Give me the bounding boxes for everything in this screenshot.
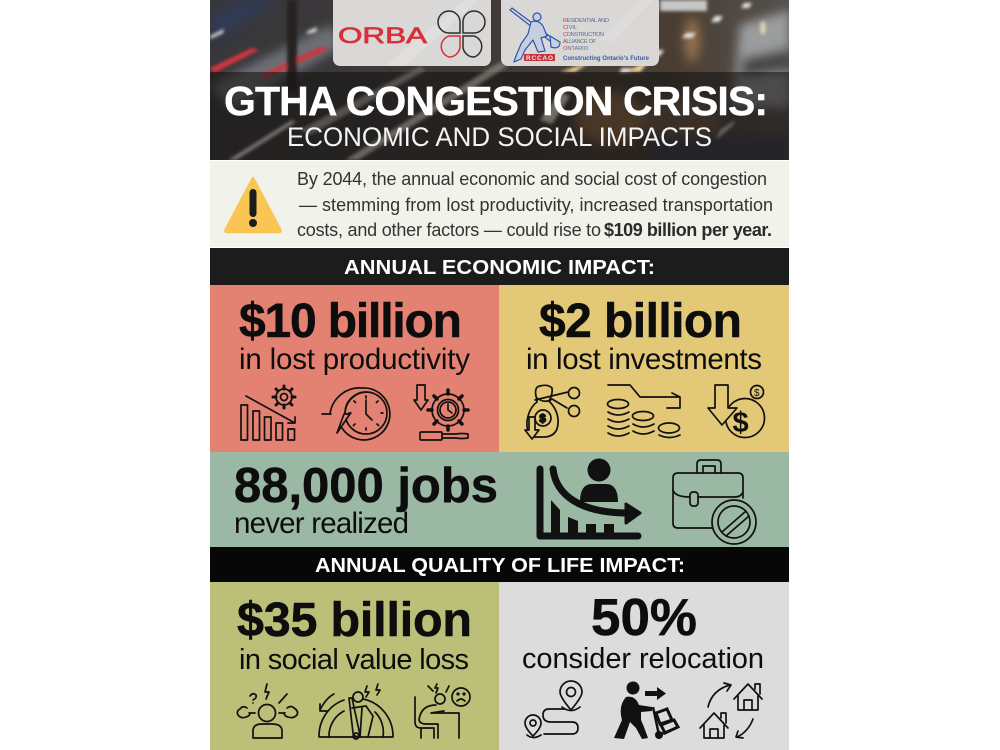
icon: stressed person <box>237 684 298 738</box>
section band: annual quality of life impact <box>210 547 789 582</box>
icon: strained person at gauge <box>319 684 393 739</box>
icon: falling dollar coin: $ <box>754 388 760 399</box>
icon: money bag with scissors: $ <box>540 413 546 425</box>
icon: gear clock with down arrow and screwdriver <box>414 385 468 440</box>
section band: annual economic impact: ANNUAL ECONOMIC IMPACT: <box>344 257 655 279</box>
header photo of blurred highway traffic <box>210 0 790 165</box>
icon: frustrated person at desk <box>415 684 470 738</box>
icon: houses with cycle arrows <box>700 683 762 738</box>
icon: shrinking coin stacks <box>608 385 680 438</box>
infographic canvas <box>210 0 789 750</box>
stat: 88,000 jobs: 88,000 jobs <box>234 459 498 513</box>
RCCAO name: ONTARIO <box>563 46 589 52</box>
stat: 50%: 50% <box>591 589 697 647</box>
icon: money bag with scissors <box>525 385 580 439</box>
intro text: — stemming from lost productivity, increased transportation <box>299 195 773 215</box>
panel: social value loss <box>210 582 499 750</box>
panel: lost investments <box>499 285 789 452</box>
stat: $35 billion: $35 billion <box>237 593 472 647</box>
panel: consider relocation <box>499 582 789 750</box>
intro text: $109 billion per year. <box>604 220 772 240</box>
icon: clock with reverse arrow <box>322 388 390 440</box>
stat: $10 billion: $10 billion <box>239 295 462 348</box>
panel: lost productivity <box>210 285 499 452</box>
label: in lost investments: in lost investments <box>526 343 762 376</box>
label: never realized: never realized <box>234 507 409 540</box>
RCCAO name: CONSTRUCTION <box>563 32 604 38</box>
icon: person over declining chart <box>540 458 640 536</box>
dark title band <box>210 72 789 160</box>
label: in social value loss: in social value loss <box>239 644 469 676</box>
icon: mover with dolly <box>614 682 678 739</box>
logo card: RCCAO <box>501 0 659 66</box>
panel: jobs never realized <box>210 452 789 547</box>
icon: falling dollar coin <box>708 385 764 439</box>
icon: briefcase with prohibition sign <box>673 460 756 544</box>
ORBA clover mark <box>438 11 485 57</box>
RCCAO name: ALLIANCE OF <box>563 39 597 45</box>
subtitle: ECONOMIC AND SOCIAL IMPACTS <box>287 122 712 152</box>
main title: GTHA CONGESTION CRISIS: <box>224 78 768 124</box>
RCCAO badge <box>524 54 555 61</box>
logo card: RCCAO: RCCAO <box>526 55 553 62</box>
section band: annual economic impact <box>210 248 789 285</box>
RCCAO name: CIVIL <box>563 25 577 31</box>
RCCAO worker figure <box>510 8 560 62</box>
intro text: costs, and other factors — could rise to <box>297 220 601 240</box>
logo card: ORBA <box>333 0 491 66</box>
icon: route between pins <box>525 681 582 738</box>
RCCAO tagline: Constructing Ontario's Future <box>563 56 650 62</box>
label: in lost productivity: in lost productivity <box>239 343 470 376</box>
intro text: By 2044, the annual economic and social cost of congestion <box>297 169 767 189</box>
panel: intro warning <box>210 161 789 247</box>
stat: $2 billion: $2 billion <box>539 295 742 348</box>
icon: declining bar chart with gear <box>241 386 295 440</box>
ORBA wordmark: ORBA <box>338 23 427 48</box>
icon: falling dollar coin: $ <box>732 407 749 439</box>
RCCAO name <box>563 18 609 52</box>
section band: annual quality of life impact: ANNUAL QUALITY OF LIFE IMPACT: <box>315 555 685 577</box>
RCCAO name: RESIDENTIAL AND <box>563 18 609 24</box>
icon: warning triangle <box>225 178 281 232</box>
label: consider relocation: consider relocation <box>522 643 764 675</box>
intro text <box>297 169 773 240</box>
